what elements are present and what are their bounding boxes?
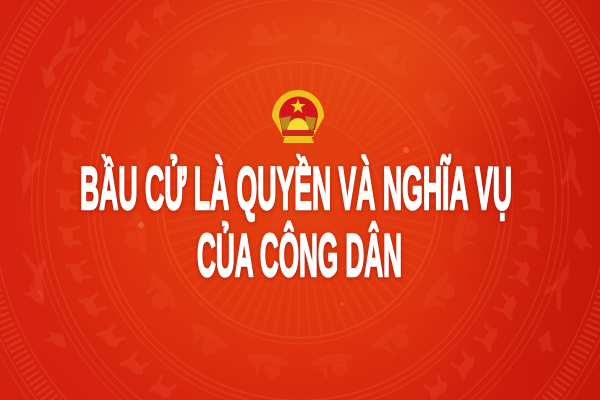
light specks <box>138 147 409 306</box>
boats ring <box>117 17 483 383</box>
gold star <box>290 98 306 113</box>
icon: national emblem <box>272 90 324 143</box>
red field <box>279 97 318 130</box>
rice sheaves <box>280 116 316 131</box>
gold wreath <box>272 90 324 137</box>
title <box>80 155 512 289</box>
cog dome <box>287 118 309 131</box>
red ribbon <box>282 130 314 136</box>
gold banner <box>283 136 314 143</box>
inner star rays <box>230 130 370 270</box>
